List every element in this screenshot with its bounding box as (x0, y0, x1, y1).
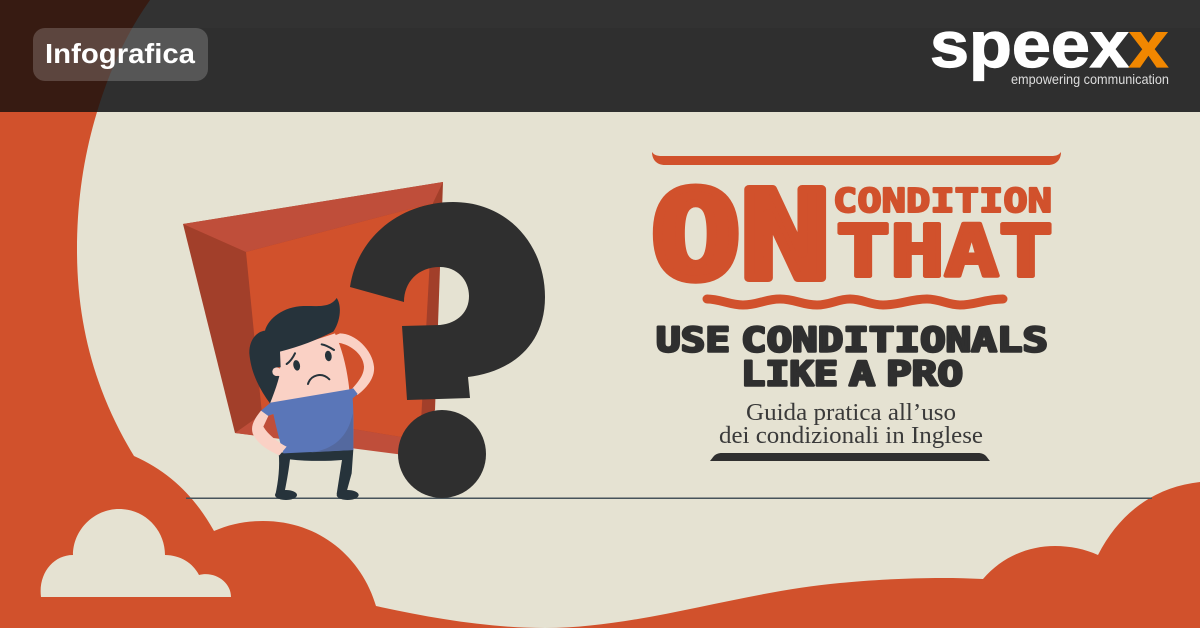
raised arm (332, 333, 374, 395)
logo: speexx: speexx (930, 8, 1168, 81)
header overlay of red curve (0, 0, 150, 112)
horizon line (186, 498, 1152, 499)
ear (272, 367, 281, 376)
description text: Guida pratica all’uso (746, 400, 956, 426)
title: on condition that: THAT (836, 210, 1053, 293)
title: on condition that (651, 165, 1053, 307)
header bar (0, 0, 1200, 112)
white cloud (41, 509, 231, 597)
hair (249, 298, 340, 403)
eyes (292, 359, 301, 371)
top decorative bar (652, 152, 1061, 165)
badge: Infografica (33, 28, 208, 81)
description text (719, 400, 983, 449)
subtitle: use conditionals like a pro: A (849, 354, 875, 394)
left arm (252, 411, 287, 455)
bottom decorative bar (710, 453, 990, 461)
description text: dei condizionali in Inglese (719, 423, 983, 449)
title: on condition that: ON (651, 165, 830, 307)
shirt shadow (310, 413, 353, 452)
wavy divider (707, 299, 1003, 305)
trousers and shoes (275, 449, 359, 500)
brows and mouth (287, 344, 334, 384)
badge: Infografica: Infografica (45, 38, 195, 69)
big question mark (350, 202, 545, 498)
subtitle: use conditionals like a pro: USE (656, 320, 730, 360)
subtitle: use conditionals like a pro (656, 320, 1048, 394)
character: confused man (249, 298, 374, 500)
shirt (261, 388, 358, 453)
title: on condition that: CONDITION (833, 181, 1052, 220)
red 3D box (183, 182, 443, 457)
logo: speexx: empowering communication (1011, 71, 1169, 87)
subtitle: use conditionals like a pro: PRO (886, 354, 963, 394)
subtitle: use conditionals like a pro: LIKE (741, 354, 838, 394)
subtitle: use conditionals like a pro: CONDITIONALS (741, 320, 1048, 360)
face (270, 333, 349, 403)
